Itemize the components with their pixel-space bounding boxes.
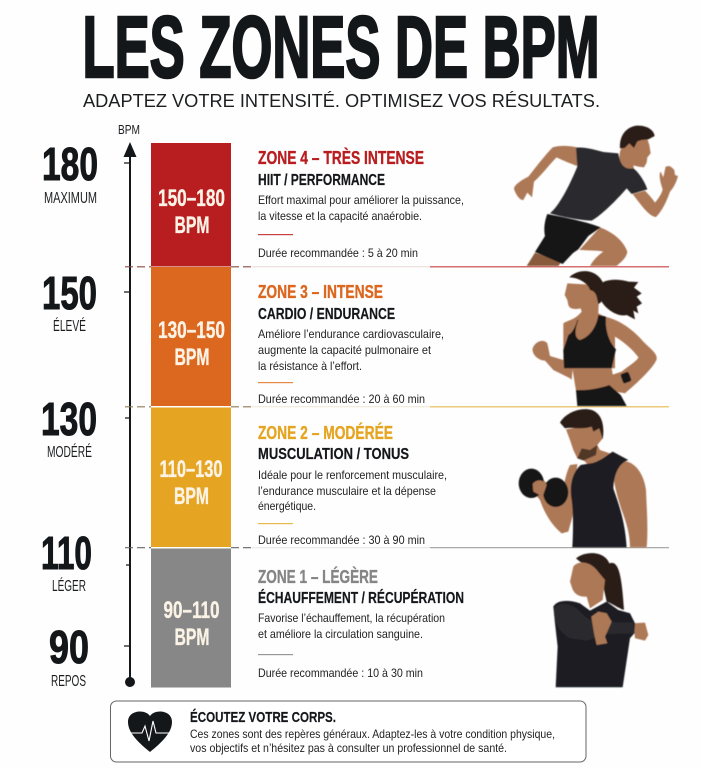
zone 4 text: HIIT / PERFORMANCE — [258, 172, 385, 189]
zone 3 text: CARDIO / ENDURANCE — [258, 306, 395, 323]
callout: listen to your body: vos objectifs et n’hésitez pas à consulter un professionnel de santé. — [190, 742, 507, 755]
zone 2 text: Durée recommandée : 30 à 90 min — [258, 534, 425, 547]
zone 2 text: ZONE 2 – MODÉRÉE — [258, 422, 393, 443]
bar zone 2 — [151, 408, 231, 547]
zone 4 text: Durée recommandée : 5 à 20 min — [258, 247, 418, 260]
value 180: 180 — [42, 138, 98, 190]
bar zone 3: BPM — [174, 344, 210, 371]
zone 3 text: Durée recommandée : 20 à 60 min — [258, 393, 425, 406]
zone 3 text: la résistance à l’effort. — [258, 360, 362, 373]
bar zone 3 — [151, 267, 231, 406]
BPM axis: BPM — [118, 123, 140, 137]
figure: running woman — [533, 271, 657, 406]
value 110 — [41, 527, 92, 595]
value 150: ÉLEVÉ — [53, 318, 86, 335]
zone 2 text: l’endurance musculaire et la dépense — [258, 485, 436, 498]
zone 2 text: énergétique. — [258, 500, 316, 513]
bar zone 4: 150–180 — [158, 185, 225, 212]
zone 4 text: la vitesse et la capacité anaérobie. — [258, 210, 422, 223]
zone 4 text — [258, 147, 464, 260]
left scale values — [41, 138, 98, 690]
value 110: LÉGER — [52, 578, 86, 595]
zone 3 text — [258, 282, 444, 406]
callout: listen to your body: ÉCOUTEZ VOTRE CORPS. — [190, 709, 336, 726]
zone 1 text: Durée recommandée : 10 à 30 min — [258, 667, 423, 680]
zone 3 text: augmente la capacité pulmonaire et — [258, 344, 432, 357]
zone 1 text: et améliore la circulation sanguine. — [258, 628, 423, 641]
zone 1 text — [258, 566, 464, 680]
bar zone 4: BPM — [174, 212, 210, 239]
zone 1 text: ZONE 1 – LÉGÈRE — [258, 566, 378, 587]
value 90 — [49, 621, 89, 690]
icon: heart with pulse — [128, 712, 172, 752]
zone 2 text: MUSCULATION / TONUS — [258, 446, 409, 463]
zone bars — [151, 143, 231, 688]
value 90: REPOS — [51, 673, 86, 690]
callout: listen to your body — [110, 701, 586, 762]
figure: man with dumbbell — [519, 409, 647, 547]
value 180 — [42, 138, 98, 207]
figure: stretching woman — [553, 553, 648, 687]
bar zone 3: 130–150 — [158, 317, 225, 344]
bar zone 4 — [151, 143, 231, 266]
value 180: MAXIMUM — [44, 190, 97, 207]
bar zone 1 — [151, 548, 231, 688]
value 110: 110 — [41, 527, 92, 579]
value 130 — [41, 393, 97, 461]
zone 3 text: ZONE 3 – INTENSE — [258, 282, 383, 302]
zone 3 text: Améliore l’endurance cardiovasculaire, — [258, 328, 444, 341]
figure: sprinting man — [514, 126, 678, 266]
bar zone 2: BPM — [174, 483, 209, 510]
value 130: 130 — [41, 393, 97, 445]
zone 2 text — [258, 422, 447, 547]
bar zone 1: 90–110 — [164, 597, 220, 624]
BPM axis — [118, 123, 140, 687]
zone 1 text: Favorise l’échauffement, la récupération — [258, 612, 445, 625]
value 150 — [42, 267, 97, 335]
value 150: 150 — [42, 267, 97, 319]
callout: listen to your body: Ces zones sont des repères généraux. Adaptez-les à votre condition physique, — [190, 728, 555, 741]
zone 4 text: Effort maximal pour améliorer la puissance, — [258, 194, 464, 207]
value 90: 90 — [49, 621, 89, 673]
zone 4 text: ZONE 4 – TRÈS INTENSE — [258, 147, 424, 168]
zone 1 text: ÉCHAUFFEMENT / RÉCUPÉRATION — [258, 590, 464, 607]
bar zone 2: 110–130 — [160, 456, 222, 483]
value 130: MODÉRÉ — [47, 444, 92, 461]
subtitle: ADAPTEZ VOTRE INTENSITÉ. OPTIMISEZ VOS RÉSULTATS. — [83, 90, 600, 111]
bar zone 1: BPM — [174, 624, 210, 651]
zone 2 text: Idéale pour le renforcement musculaire, — [258, 469, 447, 482]
